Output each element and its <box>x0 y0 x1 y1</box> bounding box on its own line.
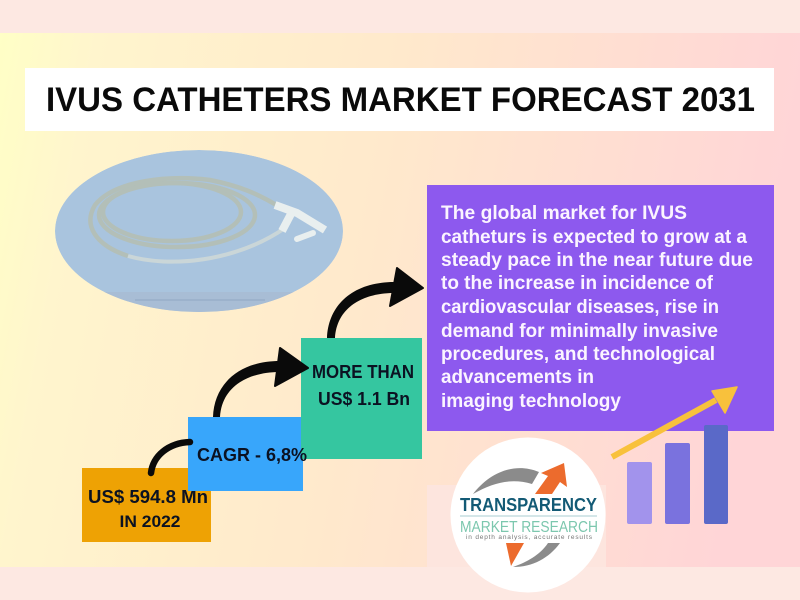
panel: market description: procedures, and technological <box>441 344 715 365</box>
logo: Transparency Market Research <box>450 438 606 592</box>
logo: Transparency Market Research: TRANSPARENCY <box>460 495 597 515</box>
step: base value: IN 2022 <box>120 512 180 531</box>
panel: market description: cardiovascular diseases, rise in <box>441 297 719 318</box>
panel: market description <box>427 185 774 431</box>
title: IVUS CATHETERS MARKET FORECAST 2031 <box>46 81 755 119</box>
logo: Transparency Market Research: in depth analysis, accurate results <box>466 534 593 541</box>
logo: Transparency Market Research: MARKET RESEARCH <box>460 519 598 536</box>
arrow: first step <box>151 442 190 473</box>
step: base value: US$ 594.8 Mn <box>88 487 208 507</box>
step: forecast value: US$ 1.1 Bn <box>318 388 410 409</box>
panel: market description: The global market for IVUS <box>441 203 687 224</box>
panel: market description: catheturs is expected to grow at a <box>441 227 747 248</box>
panel: market description: demand for minimally invasive <box>441 321 718 342</box>
panel: market description: imaging technology <box>441 391 621 412</box>
panel: market description: advancements in <box>441 367 594 388</box>
panel: market description: steady pace in the near future due <box>441 250 753 271</box>
photo: IVUS catheter <box>55 150 345 314</box>
title <box>25 68 774 131</box>
panel: market description: to the increase in incidence of <box>441 273 714 294</box>
step: forecast value: MORE THAN <box>312 362 414 382</box>
step: CAGR: CAGR - 6,8% <box>197 445 307 465</box>
step: base value <box>82 417 303 542</box>
arrow: third step <box>327 268 423 338</box>
step: CAGR <box>188 338 422 491</box>
step: forecast value <box>312 362 414 409</box>
icon: growth bar chart <box>612 387 737 524</box>
arrow: second step <box>213 348 308 417</box>
